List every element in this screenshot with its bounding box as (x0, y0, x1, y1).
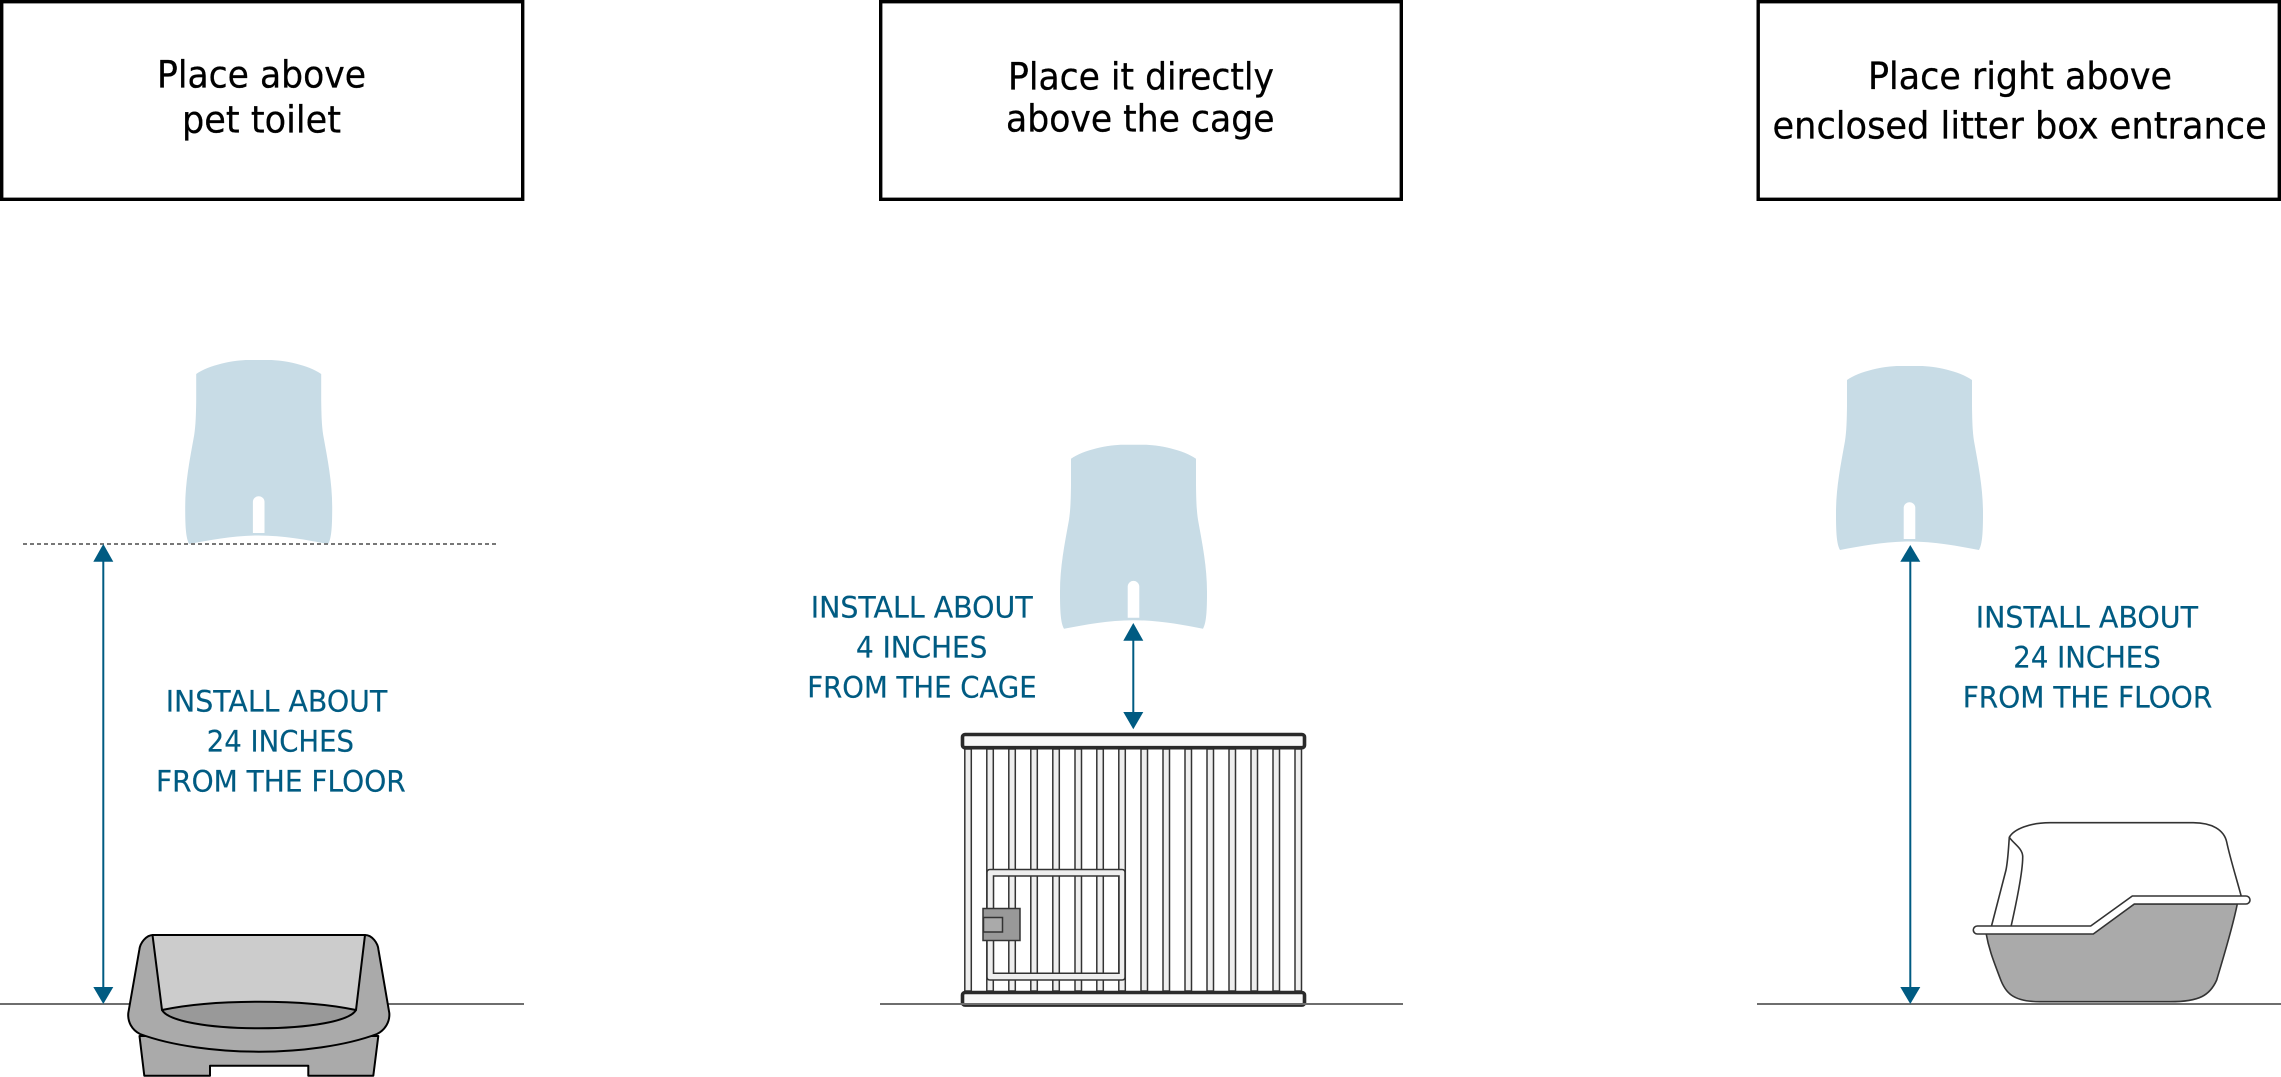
heading box: place right above enclosed litter box entrance: enclosed litter box entrance (1772, 104, 2267, 147)
heading box: place it directly above the cage: Place it directly (1008, 55, 1274, 98)
icon: cage (962, 734, 1304, 1005)
dashed height line (23, 543, 497, 545)
label: install about 24 inches from the floor: 24 INCHES (2013, 641, 2161, 675)
label: install about 4 inches from the cage: FROM THE CAGE (807, 671, 1037, 705)
heading box: place it directly above the cage (881, 2, 1401, 199)
arrow: 4 inches from cage (1123, 623, 1143, 729)
label: install about 4 inches from the cage: INSTALL ABOUT (811, 591, 1034, 625)
label: install about 24 inches from the floor: FROM THE FLOOR (156, 765, 406, 799)
heading box: place above pet toilet (2, 2, 523, 199)
panel: above the cage (807, 2, 1403, 1005)
label: install about 24 inches from the floor: FROM THE FLOOR (1963, 681, 2212, 715)
label: install about 24 inches from the floor: 24 INCHES (207, 725, 354, 759)
floor line (0, 1003, 524, 1005)
icon: dispenser above cage (1060, 445, 1207, 629)
label: install about 4 inches from the cage: 4 INCHES (856, 631, 987, 665)
heading box: place above pet toilet: pet toilet (182, 98, 341, 142)
icon: pet toilet (128, 935, 389, 1076)
label: install about 24 inches from the floor (1963, 601, 2212, 715)
icon: enclosed litter box (1973, 823, 2250, 1002)
icon: dispenser above toilet (185, 360, 332, 544)
floor line (880, 1003, 1403, 1005)
label: install about 24 inches from the floor: INSTALL ABOUT (1976, 601, 2199, 635)
heading box: place right above enclosed litter box entrance (1758, 2, 2279, 199)
heading box: place it directly above the cage: above the cage (1006, 98, 1274, 141)
icon: dispenser above litter box (1836, 366, 1983, 550)
label: install about 24 inches from the floor: INSTALL ABOUT (166, 685, 388, 719)
arrow: 24 inches from floor (1900, 545, 1920, 1004)
heading box: place right above enclosed litter box entrance: Place right above (1868, 55, 2172, 98)
panel: above enclosed litter box (1757, 2, 2281, 1004)
floor line (1757, 1003, 2281, 1005)
label: install about 24 inches from the floor (156, 685, 406, 799)
heading box: place above pet toilet: Place above (157, 54, 366, 96)
arrow: 24 inches from floor (93, 544, 113, 1004)
label: install about 4 inches from the cage (807, 591, 1037, 705)
panel: above pet toilet (0, 2, 524, 1076)
